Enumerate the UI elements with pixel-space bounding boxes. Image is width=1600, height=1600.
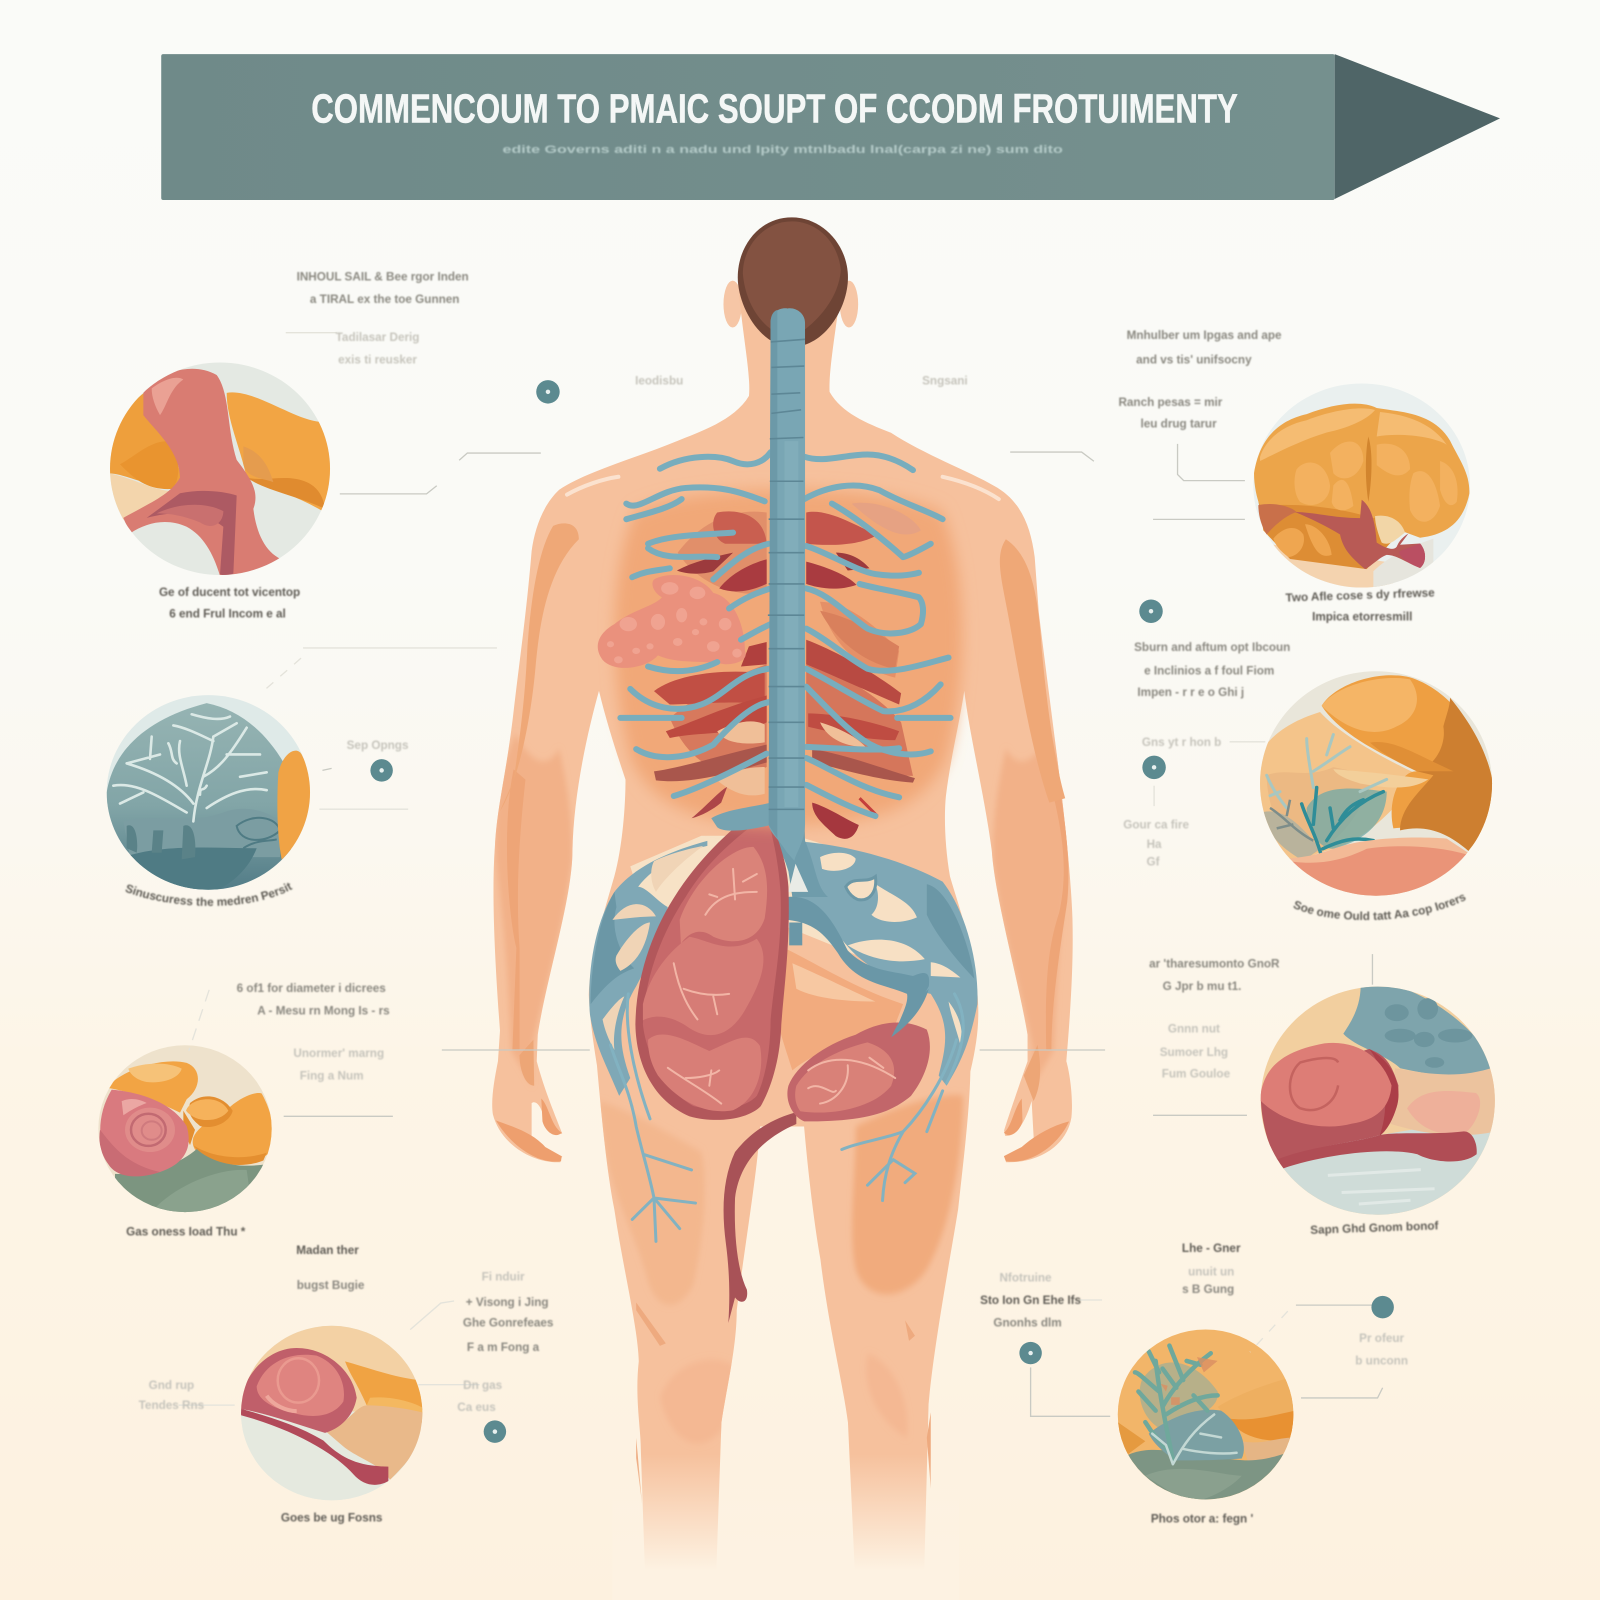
knee marks <box>636 1303 931 1504</box>
text block: right middle lower: Ha <box>1147 838 1162 851</box>
soft limb shading <box>495 734 1070 1443</box>
text block: left lower note: 6 of1 for diameter i dicrees <box>237 982 386 995</box>
panel: middle left blue circle <box>107 695 313 893</box>
text block: top left note: a TIRAL ex the toe Gunnen <box>310 293 459 306</box>
text block: bottom left heading: bugst Bugie <box>297 1279 365 1292</box>
upper body details <box>500 308 1065 861</box>
text block: right lower secondary: Sumoer Lhg <box>1160 1046 1228 1059</box>
text block: bottom center right note: Nfotruine <box>999 1272 1052 1285</box>
blue vessels right pelvis <box>792 841 978 1086</box>
caption: middle left circle: Sinuscuress the medren Persit <box>124 882 294 907</box>
marker dot 5 <box>484 1420 506 1443</box>
marker dot 6 <box>1019 1342 1042 1364</box>
subtitle: edite Governs aditi n a nadu und Ipity mtnlbadu lnal(carpa zi ne) sum dito <box>503 144 1063 156</box>
body silhouette <box>492 291 1073 1600</box>
text block: bottom left heading: Madan ther <box>296 1244 359 1257</box>
leg bottom fade <box>612 1454 959 1600</box>
knees <box>663 1362 732 1440</box>
text block: bottom left note: Fi nduir <box>482 1271 525 1284</box>
ears <box>723 281 858 328</box>
panel: upper right orange circle <box>1253 383 1470 592</box>
text block: left lower secondary: Fing a Num <box>300 1070 364 1083</box>
pink lung mass <box>598 575 746 668</box>
caption: bottom left circle: Goes be ug Fosns <box>281 1511 383 1524</box>
text block: right middle note: Sburn and aftum opt Ibcoun <box>1134 641 1290 654</box>
text block: bottom center right note <box>980 1272 1082 1330</box>
panel: upper left organ circle <box>107 362 334 577</box>
left forearm shading <box>495 734 572 1086</box>
small kidney with ureter <box>724 989 930 1323</box>
text block: right lower secondary: Gnnn nut <box>1168 1023 1220 1036</box>
chest shading <box>614 489 962 825</box>
organs behind ribs <box>654 503 921 839</box>
text block: bottom right tag: Pr ofeur <box>1359 1332 1405 1345</box>
text block: left lower secondary: Unormer' marng <box>293 1047 384 1060</box>
caption: upper right circle: Impica etorresmill <box>1312 610 1412 623</box>
text block: bottom right heading <box>1182 1242 1241 1296</box>
text block: right middle note <box>1134 641 1290 699</box>
text block: bottom right tag <box>1355 1332 1408 1367</box>
right hand shading <box>1004 1121 1069 1162</box>
text block: top right secondary <box>1118 396 1223 431</box>
text block: top right secondary: leu drug tarur <box>1140 418 1217 431</box>
panel: lower left circle <box>98 1045 274 1218</box>
upper arm muscles <box>500 523 579 812</box>
white branches <box>113 714 267 821</box>
text block: right middle lower: Gf <box>1147 855 1160 868</box>
panel: middle right orange circle <box>1257 671 1494 898</box>
text block: top right secondary: Ranch pesas = mir <box>1118 396 1223 409</box>
title banner arrow <box>161 54 1500 200</box>
lower vertebra flare <box>711 803 771 831</box>
text block: right lower secondary: Fum Gouloe <box>1162 1068 1231 1081</box>
large kidney <box>635 805 789 1120</box>
text block: center left tag: Sep Opngs <box>347 739 409 752</box>
text block: top left note: INHOUL SAIL & Bee rgor Inden <box>297 271 469 284</box>
left hand shading <box>496 1120 561 1162</box>
text block: right lower note: ar 'tharesumonto GnoR <box>1149 957 1280 970</box>
text block: center top left tag: Ieodisbu <box>635 375 683 388</box>
text block: right middle note: Impen - r r e o Ghi j <box>1137 686 1244 699</box>
text block: bottom left tag: Gnd rup <box>149 1379 194 1392</box>
rib cage <box>620 452 951 816</box>
text block: bottom right heading: Lhe - Gner <box>1182 1242 1241 1255</box>
caption: upper right circle: Two Afle cose s dy rfrewse <box>1285 586 1435 605</box>
blue vessels left pelvis <box>589 841 707 1096</box>
marker dot 4 <box>1142 756 1166 779</box>
text block: top left secondary: exis ti reusker <box>338 353 417 366</box>
marker dot 7 <box>1371 1296 1394 1318</box>
text block: bottom left inner tag: Ca eus <box>457 1401 496 1414</box>
text block: bottom left note: + Visong i Jing <box>466 1296 549 1309</box>
marker dot 3 <box>370 759 393 782</box>
text block: bottom center right note: Sto Ion Gn Ehe Ifs <box>980 1294 1082 1307</box>
text block: bottom left note: F a m Fong a <box>467 1341 540 1354</box>
teal coral branches <box>1302 788 1383 857</box>
text block: top left secondary: Tadilasar Derig <box>336 331 419 344</box>
cream pelvis fill <box>630 836 966 984</box>
text block: bottom right heading: unuit un <box>1188 1266 1234 1279</box>
caption: upper left circle <box>159 586 300 620</box>
text block: bottom right tag: b unconn <box>1355 1354 1408 1367</box>
text block: bottom left note: Ghe Gonrefeaes <box>463 1317 554 1330</box>
text block: top left secondary <box>336 331 419 366</box>
marker dot 2 <box>1139 599 1163 623</box>
text block: right middle tag: Gns yt r hon b <box>1142 736 1221 749</box>
kidney veins <box>668 869 757 1104</box>
title: COMMENCOUM TO PMAIC SOUPT OF CCODM FROTUIMENTY <box>311 85 1238 131</box>
left thigh vein branches <box>610 994 695 1241</box>
shoulder highlights <box>567 477 999 499</box>
human figure <box>492 217 1073 1600</box>
organ backing <box>1255 481 1400 569</box>
text block: left lower secondary <box>293 1047 384 1083</box>
text block: right lower secondary <box>1160 1023 1231 1081</box>
spine <box>768 308 805 861</box>
right forearm stripe <box>1046 774 1068 1050</box>
text block: right middle lower <box>1123 819 1189 868</box>
panel: bottom left circle <box>237 1325 427 1505</box>
caption: lower left circle: Gas oness Ioad Thu * <box>126 1226 246 1239</box>
marker dot 1 <box>536 380 560 404</box>
text block: left lower note: A - Mesu rn Mong Is - rs <box>257 1004 390 1017</box>
left pelvis windows <box>603 846 703 1050</box>
text block: bottom left note <box>463 1271 554 1354</box>
text block: bottom left heading <box>296 1244 365 1292</box>
panel: bottom right coral circle <box>1118 1330 1295 1502</box>
panel: lower right circle <box>1261 978 1497 1219</box>
caption: bottom right circle: Phos otor a: fegn ' <box>1151 1512 1253 1525</box>
abdomen orange between kidneys <box>778 948 903 1070</box>
text block: right middle lower: Gour ca fire <box>1123 819 1189 832</box>
left forearm stripe <box>507 769 525 1050</box>
caption: middle right circle: Soe ome Ould tatt Aa cop Iorers <box>1292 894 1466 921</box>
text block: right lower note: G Jpr b mu t1. <box>1163 980 1241 993</box>
connector lines <box>179 333 1383 1416</box>
coral branches <box>1135 1346 1218 1460</box>
hair <box>738 217 848 347</box>
thigh muscles <box>599 1101 705 1305</box>
caption: upper left circle: 6 end Frul Incom e al <box>169 607 286 620</box>
text block: bottom left inner tag <box>457 1379 503 1414</box>
text block: top left note <box>297 271 469 306</box>
text block: bottom left tag <box>139 1379 205 1412</box>
text block: bottom center right note: Gnonhs dlm <box>993 1317 1062 1330</box>
text block: left lower note <box>237 982 390 1017</box>
lower body details <box>496 769 1069 1504</box>
right thigh vein branches <box>842 994 963 1201</box>
small kidney veins <box>808 1058 895 1104</box>
text block: right middle note: e Inclinios a f foul Fiom <box>1144 664 1274 677</box>
caption: upper right circle <box>1285 586 1435 623</box>
text block: bottom right heading: s B Gung <box>1182 1283 1234 1296</box>
right forearm shading <box>993 734 1070 1086</box>
text block: top right note: Mnhulber um Ipgas and ape <box>1127 329 1282 342</box>
text block: bottom left tag: Tendes Rns <box>139 1399 205 1412</box>
right pelvis windows <box>820 853 962 1045</box>
text block: top right note: and vs tis' unifsocny <box>1136 353 1252 366</box>
caption: lower right circle: Sapn Ghd Gnom bonof <box>1310 1219 1439 1237</box>
text block: bottom left inner tag: Dn gas <box>463 1379 503 1392</box>
caption: upper left circle: Ge of ducent tot vicentop <box>159 586 300 599</box>
text block: top right note <box>1127 329 1282 366</box>
text block: right lower note <box>1149 957 1280 993</box>
central trunk <box>775 800 828 897</box>
text block: center top right tag: Sngsani <box>922 375 968 388</box>
